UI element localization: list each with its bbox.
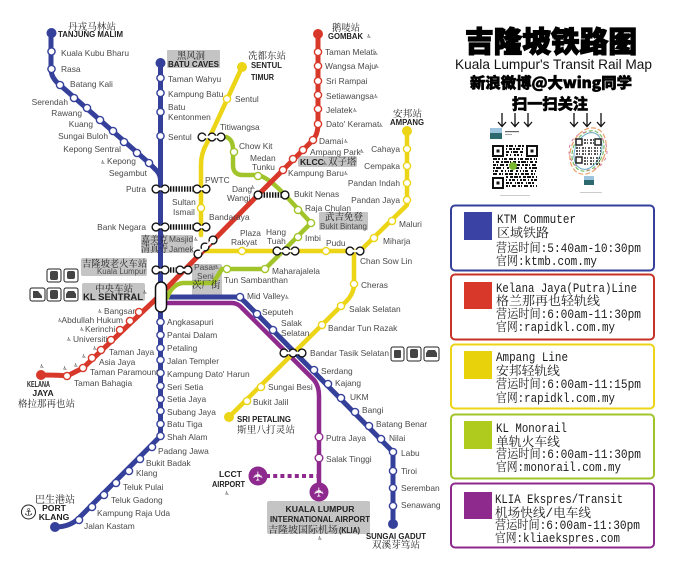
terminal station names: SRI PETALING bbox=[237, 414, 291, 424]
station names: Teluk Gadong bbox=[111, 495, 163, 505]
station names: Bangi bbox=[362, 405, 384, 415]
Ampang terminals bbox=[224, 62, 412, 422]
station names: Bandar Tasik Selatan bbox=[310, 348, 389, 358]
terminal station names: 巴生港站 bbox=[35, 493, 75, 506]
QR code: WeChat bbox=[490, 128, 537, 196]
station names: Rasa bbox=[61, 64, 81, 74]
station names: Sri Rampai bbox=[326, 76, 368, 86]
legend: KLIA Ekspres/Transit: 营运时间:6:00am-11:30pm bbox=[495, 517, 640, 533]
legend: Ampang: 安邦轻轨线 bbox=[496, 363, 560, 379]
station names: Bank Negara bbox=[97, 222, 146, 232]
station names: Seremban bbox=[401, 483, 440, 493]
facility icons: Bandar Tasik Selatan bbox=[391, 347, 439, 361]
station names: Senawang bbox=[401, 500, 441, 510]
station names: Kerinchi bbox=[85, 324, 115, 334]
interchange station names: Kuala Lumpur bbox=[97, 267, 146, 276]
station names: Miharja bbox=[383, 236, 411, 246]
wheelchair access markers: ♿ bbox=[82, 354, 87, 360]
station names: Bukit Nenas bbox=[294, 189, 339, 199]
wheelchair access markers: ♿ bbox=[101, 160, 106, 166]
station names: Salak Tinggi bbox=[326, 454, 372, 464]
subtitle: Kuala Lumpur's Transit Rail Map bbox=[455, 56, 652, 72]
legend: KTM Commuter: 区域铁路 bbox=[497, 225, 550, 241]
KLIA airport icon bbox=[310, 482, 328, 502]
station names: Dang bbox=[232, 184, 252, 194]
legend: KL Monorail: 官网:monorail.com.my bbox=[496, 459, 621, 475]
station names: Sungai Besi bbox=[268, 382, 313, 392]
station names: Pudu bbox=[326, 238, 346, 248]
station names: Petaling bbox=[167, 343, 198, 353]
wheelchair access markers: ♿ bbox=[93, 346, 98, 352]
KL Sentral hub bbox=[156, 282, 166, 312]
interchange station names: 嘉美克 bbox=[141, 234, 168, 246]
station names: Damai bbox=[319, 136, 343, 146]
station names: Sultan bbox=[172, 197, 196, 207]
station names: Universiti bbox=[73, 334, 108, 344]
interchange station names: Seni bbox=[197, 271, 214, 281]
Airport line stations bbox=[315, 433, 323, 462]
interchange stations bbox=[156, 137, 360, 353]
interchange station names: Masjid bbox=[169, 234, 194, 244]
wheelchair access markers: ♿ bbox=[353, 108, 358, 114]
station names: Seri Setia bbox=[167, 382, 204, 392]
legend: Kelana Jaya: 格兰那再也轻轨线 bbox=[496, 293, 601, 309]
station names: Asia Jaya bbox=[99, 357, 136, 367]
station names: Subang Jaya bbox=[167, 407, 216, 417]
terminal station names: AMPANG bbox=[390, 117, 424, 127]
interchange station names: 吉隆坡老火车站 bbox=[82, 258, 147, 270]
station names: Kuang bbox=[69, 119, 93, 129]
terminal station names: BATU CAVES bbox=[168, 59, 219, 69]
terminal station names: JAYA bbox=[32, 388, 54, 398]
facility icons: Kuala Lumpur and KL Sentral bbox=[30, 269, 78, 301]
legend: KLIA Ekspres/Transit bbox=[451, 484, 654, 548]
wheelchair access markers: ♿ bbox=[344, 171, 349, 177]
station names: Bukit Badak bbox=[146, 458, 192, 468]
station names: Salak bbox=[281, 318, 303, 328]
interchange station names: KL SENTRAL bbox=[83, 292, 143, 303]
station names: Raja Chulan bbox=[305, 203, 351, 213]
scan prompt: 扫一扫关注 bbox=[512, 93, 588, 114]
wheelchair access markers bbox=[40, 34, 384, 542]
station names: Maluri bbox=[399, 219, 422, 229]
station names: Jalan Kastam bbox=[84, 521, 135, 531]
Ampang stations bbox=[197, 95, 411, 405]
station names: Bandaraya bbox=[209, 212, 250, 222]
legend: Kelana Jaya: Kelana Jaya(Putra)Line bbox=[496, 282, 637, 296]
wheelchair access markers: ♿ bbox=[225, 491, 230, 497]
terminal station names: SUNGAI GADUT bbox=[366, 531, 427, 541]
station names: Serdang bbox=[321, 366, 353, 376]
line: KTM Commuter (blue) bbox=[51, 33, 393, 527]
station names: Padang Jawa bbox=[158, 446, 209, 456]
station names: Seputeh bbox=[262, 307, 294, 317]
terminal station names: 格拉那再也站 bbox=[18, 398, 75, 410]
KTM terminals bbox=[46, 28, 398, 532]
wheelchair access markers: ♿ bbox=[74, 363, 79, 369]
station names: Sentul bbox=[168, 132, 192, 142]
station names: Tun Sambanthan bbox=[224, 275, 288, 285]
station names: Sungai Buloh bbox=[58, 131, 108, 141]
Kelana Jaya stations bbox=[63, 48, 322, 380]
station names: Dato' Keramat bbox=[326, 119, 380, 129]
wheelchair access markers: ♿ bbox=[375, 64, 380, 70]
grey label backgrounds bbox=[81, 50, 370, 534]
station names: Batang Kali bbox=[70, 79, 113, 89]
terminal station names: KELANA bbox=[27, 379, 50, 389]
station names: Wangsa Maju bbox=[325, 61, 376, 71]
station names: Hang bbox=[266, 227, 286, 237]
QR code: Weibo fingerprint bbox=[563, 122, 613, 193]
station names: Teluk Pulai bbox=[123, 482, 164, 492]
KLIA airport icon: ✈ bbox=[312, 486, 328, 497]
station names: Pantai Dalam bbox=[167, 330, 217, 340]
terminal station names: TANJUNG MALIM bbox=[58, 29, 123, 39]
interchange links bbox=[170, 189, 285, 270]
station names: Plaza bbox=[240, 228, 261, 238]
interchange station names: KLCC bbox=[300, 157, 324, 167]
legend: KL Monorail: KL Monorail bbox=[496, 422, 567, 436]
station names: Bukit Jalil bbox=[253, 397, 289, 407]
wheelchair access markers: ♿ bbox=[58, 318, 63, 324]
legend: KLIA Ekspres/Transit: 机场快线/电车线 bbox=[495, 505, 591, 521]
icon: port anchor bbox=[22, 505, 36, 519]
station names: Kepong bbox=[107, 156, 136, 166]
legend: Kelana Jaya: 官网:rapidkl.com.my bbox=[496, 319, 615, 335]
title: 吉隆坡铁路图 bbox=[465, 19, 637, 61]
station names: Bandar Tun Razak bbox=[328, 323, 398, 333]
station names bbox=[32, 47, 441, 531]
KTM stations bbox=[48, 48, 397, 524]
station names: Shah Alam bbox=[167, 432, 208, 442]
station names: Batang Benar bbox=[376, 419, 427, 429]
icon: port anchor: ⚓ bbox=[24, 508, 33, 518]
interchange station names: Bukit Bintang bbox=[320, 221, 367, 231]
wheelchair access markers: ♿ bbox=[80, 327, 85, 333]
interchange station names: 中央车站 bbox=[95, 283, 133, 295]
station names: Abdullah Hukum bbox=[62, 315, 123, 325]
wheelchair access markers: ♿ bbox=[143, 290, 148, 296]
terminal station names: 黑风洞 bbox=[177, 51, 205, 62]
terminal station names bbox=[18, 21, 427, 551]
station names: Pandan Jaya bbox=[351, 195, 400, 205]
wheelchair access markers: ♿ bbox=[323, 161, 328, 167]
station names: Taman Bahagia bbox=[74, 378, 133, 388]
station names: Cempaka bbox=[364, 161, 400, 171]
terminal station names: KUALA LUMPUR bbox=[286, 504, 355, 514]
station names: Wangi bbox=[227, 193, 251, 203]
station names: Kentonmen bbox=[168, 112, 211, 122]
station names: Tuah bbox=[267, 236, 286, 246]
LCCT airport icon: ✈ bbox=[252, 470, 266, 481]
station names: Ismail bbox=[173, 207, 195, 217]
station names: Sentul bbox=[235, 94, 259, 104]
wheelchair access markers: ♿ bbox=[98, 309, 103, 315]
interchange station names: 武吉免登 bbox=[325, 211, 364, 223]
station names: Kampung Raja Uda bbox=[97, 508, 170, 518]
terminal station names: KLANG bbox=[39, 512, 70, 522]
interchange station names bbox=[82, 156, 367, 303]
wheelchair access markers: ♿ bbox=[67, 337, 72, 343]
wheelchair access markers: ♿ bbox=[63, 366, 68, 372]
Monorail stations bbox=[223, 148, 315, 273]
station names: Cheras bbox=[361, 280, 388, 290]
station names: Segambut bbox=[109, 168, 148, 178]
line: KL Monorail (green) bbox=[167, 137, 311, 298]
wheelchair access markers: ♿ bbox=[40, 364, 45, 370]
station names: Kajang bbox=[335, 378, 361, 388]
wheelchair access markers: ♿ bbox=[367, 34, 372, 40]
station names: Ampang Park bbox=[310, 147, 362, 157]
terminal station names: AIRPORT bbox=[212, 479, 246, 489]
legend: KLIA Ekspres/Transit: 官网:kliaekspres.com bbox=[495, 530, 620, 546]
wheelchair access markers: ♿ bbox=[251, 185, 256, 191]
Kelana Jaya terminals bbox=[36, 29, 323, 380]
line: Ampang (yellow) bbox=[201, 67, 407, 417]
line: Kelana Jaya (red) bbox=[41, 34, 318, 376]
station names: UKM bbox=[350, 392, 369, 402]
station names: Setia Jaya bbox=[167, 394, 206, 404]
legend: KLIA Ekspres/Transit: KLIA Ekspres/Transit bbox=[495, 493, 623, 507]
interchange station names: Jamek bbox=[169, 244, 194, 254]
station names: Chan Sow Lin bbox=[360, 256, 412, 266]
terminal station names: SENTUL bbox=[251, 60, 282, 70]
wheelchair access markers: ♿ bbox=[344, 139, 349, 145]
terminal station names: GOMBAK bbox=[328, 31, 364, 41]
legend: Ampang: Ampang Line bbox=[496, 351, 568, 365]
station names: Mid Valley bbox=[247, 291, 286, 301]
legend: Ampang: 官网:rapidkl.com.my bbox=[496, 390, 615, 406]
station names: Putra bbox=[126, 184, 146, 194]
station names: Pandan Indah bbox=[348, 178, 400, 188]
wheelchair access markers: ♿ bbox=[374, 94, 379, 100]
terminal station names: INTERNATIONAL AIRPORT bbox=[270, 514, 371, 524]
station names: Serendah bbox=[32, 97, 68, 107]
terminal station names: TIMUR bbox=[251, 72, 275, 82]
legend: Ampang: 营运时间:6:00am-11:15pm bbox=[496, 376, 641, 392]
line: KLIA Ekspres / Transit (purple) bbox=[166, 303, 319, 490]
terminal station names: 斯里八打灵站 bbox=[237, 424, 295, 436]
station names: Rakyat bbox=[231, 237, 258, 247]
wheelchair access markers: ♿ bbox=[374, 51, 379, 57]
station names: Rawang bbox=[51, 108, 82, 118]
station names: Kuala Kubu Bharu bbox=[61, 48, 129, 58]
wheelchair access markers: ♿ bbox=[360, 149, 365, 155]
legend: KL Monorail: 营运时间:6:00am-11:30pm bbox=[496, 446, 641, 462]
terminal station names: LCCT bbox=[219, 469, 243, 479]
interchange station names: 双子塔 bbox=[328, 156, 357, 168]
station names: Kampung Dato' Harun bbox=[167, 369, 250, 379]
station names: Putra Jaya bbox=[326, 433, 366, 443]
station names: Imbi bbox=[305, 233, 321, 243]
terminal station names: 安邦站 bbox=[393, 108, 422, 120]
station names: Selatan bbox=[281, 328, 310, 338]
station names: Taman Melati bbox=[325, 47, 375, 57]
LCCT airport icon bbox=[248, 466, 268, 486]
station names: Kampung Baru bbox=[288, 168, 344, 178]
station names: Cahaya bbox=[371, 144, 400, 154]
wheelchair access markers: ♿ bbox=[318, 536, 323, 542]
station names: Setiawangsa bbox=[326, 91, 374, 101]
terminal station names: 冼都东站 bbox=[248, 50, 286, 62]
station names: Titiwangsa bbox=[220, 122, 260, 132]
legend: Ampang bbox=[451, 344, 654, 408]
station names: Tunku bbox=[252, 162, 275, 172]
wheelchair access markers: ♿ bbox=[379, 123, 384, 129]
station names: Nilai bbox=[389, 433, 405, 443]
terminal station names: PORT bbox=[42, 503, 67, 513]
station names: Klang bbox=[136, 468, 158, 478]
legend: KTM Commuter bbox=[451, 206, 654, 270]
terminal station names: 双溪芽笃站 bbox=[372, 539, 420, 551]
legend: Kelana Jaya: 营运时间:6:00am-11:30pm bbox=[496, 306, 641, 322]
legend: KTM Commuter: 官网:ktmb.com.my bbox=[496, 253, 597, 269]
station names: Labu bbox=[401, 448, 420, 458]
weibo credit: 新浪微博@大wing同学 bbox=[470, 72, 632, 93]
station names: Kepong Sentral bbox=[63, 144, 121, 154]
station names: PWTC bbox=[205, 175, 230, 185]
legend: KL Monorail bbox=[451, 414, 654, 478]
station names: Batu Tiga bbox=[167, 419, 203, 429]
wheelchair access markers: ♿ bbox=[194, 237, 199, 243]
station names: Taman Jaya bbox=[109, 347, 154, 357]
station names: Chow Kit bbox=[239, 141, 273, 151]
station names: Jalan Templer bbox=[167, 356, 219, 366]
interchange station names: 茨厂街 bbox=[192, 279, 221, 291]
legend: KL Monorail: 单轨火车线 bbox=[496, 434, 560, 450]
legend: KTM Commuter: 营运时间:5:40am-10:30pm bbox=[496, 240, 641, 256]
station names: Batu bbox=[168, 102, 186, 112]
station names: Bangsar bbox=[104, 306, 135, 316]
station names: Angkasapuri bbox=[167, 317, 214, 327]
terminal station names: (KLIA) bbox=[339, 525, 360, 535]
legend: KTM Commuter: KTM Commuter bbox=[497, 213, 576, 227]
station names: Maharajalela bbox=[272, 266, 320, 276]
station names: Medan bbox=[250, 153, 276, 163]
legend bbox=[451, 206, 654, 548]
legend: Kelana Jaya bbox=[451, 274, 654, 340]
interchange station names: Pasar bbox=[194, 262, 216, 272]
interchange station names: 清真寺 bbox=[141, 243, 168, 255]
wheelchair access markers: ♿ bbox=[285, 295, 290, 301]
station names: Taman Wahyu bbox=[168, 74, 222, 84]
arrows pointing to QR codes bbox=[498, 113, 605, 126]
station names: Kampung Batu bbox=[168, 89, 224, 99]
terminal station names: 吉隆坡国际机场 bbox=[268, 524, 338, 536]
station names: Taman Paramount bbox=[90, 367, 159, 377]
station names: Salak Selatan bbox=[349, 304, 401, 314]
wheelchair access markers: ♿ bbox=[215, 265, 220, 271]
station names: Tiroi bbox=[401, 466, 417, 476]
station names: Jelatek bbox=[326, 105, 353, 115]
terminal station names: 丹戎马林站 bbox=[68, 21, 116, 33]
terminal station names: 鹅唛站 bbox=[332, 22, 360, 34]
